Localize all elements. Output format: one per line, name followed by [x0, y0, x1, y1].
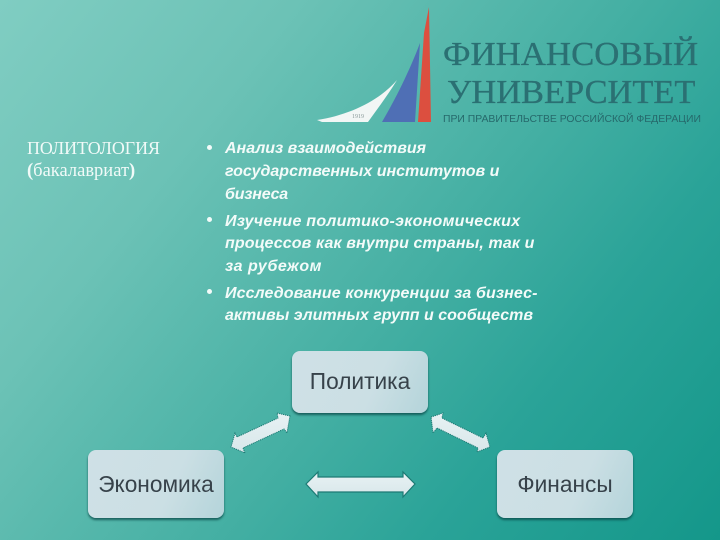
logo: Financial University	[317, 7, 701, 124]
arrow: Политика to Финансы	[431, 413, 490, 452]
bullet 1: государственных институтов и	[225, 163, 499, 180]
bullet 1	[207, 140, 500, 203]
logo title: УНИВЕРСИТЕТ	[447, 74, 695, 110]
bullet list	[207, 140, 538, 324]
heading: subject	[27, 138, 160, 181]
box: Политика	[292, 351, 428, 413]
box: Политика: Политика	[310, 368, 410, 394]
logo title: ФИНАНСОВЫЙ	[443, 36, 698, 72]
bullet 3: Исследование конкуренции за бизнес-	[225, 285, 538, 302]
bullet 1: бизнеса	[225, 186, 288, 203]
logo title: ПРИ ПРАВИТЕЛЬСТВЕ РОССИЙСКОЙ ФЕДЕРАЦИИ	[443, 114, 701, 124]
icon: sail emblem: 1919	[352, 114, 364, 120]
bullet 3: активы элитных групп и сообществ	[225, 307, 533, 324]
bullet 1: Анализ взаимодействия	[225, 140, 426, 157]
arrow: Экономика to Политика	[231, 413, 290, 453]
bullet 3	[207, 285, 538, 324]
bullet 2	[207, 213, 535, 275]
bullet 2: Изучение политико-экономических	[225, 213, 520, 230]
box: Экономика	[88, 450, 224, 518]
arrow: Экономика to Финансы	[306, 472, 415, 497]
logo title	[443, 36, 701, 124]
heading: subject: (бакалавриат)	[27, 161, 135, 181]
bullet 2: процессов как внутри страны, так и	[225, 235, 535, 252]
icon: sail emblem	[317, 7, 431, 122]
bullet 2: за рубежом	[225, 258, 322, 275]
box: Финансы: Финансы	[517, 471, 613, 497]
box: Финансы	[497, 450, 633, 518]
heading: subject: ПОЛИТОЛОГИЯ	[27, 138, 160, 158]
box: Экономика: Экономика	[98, 471, 214, 497]
